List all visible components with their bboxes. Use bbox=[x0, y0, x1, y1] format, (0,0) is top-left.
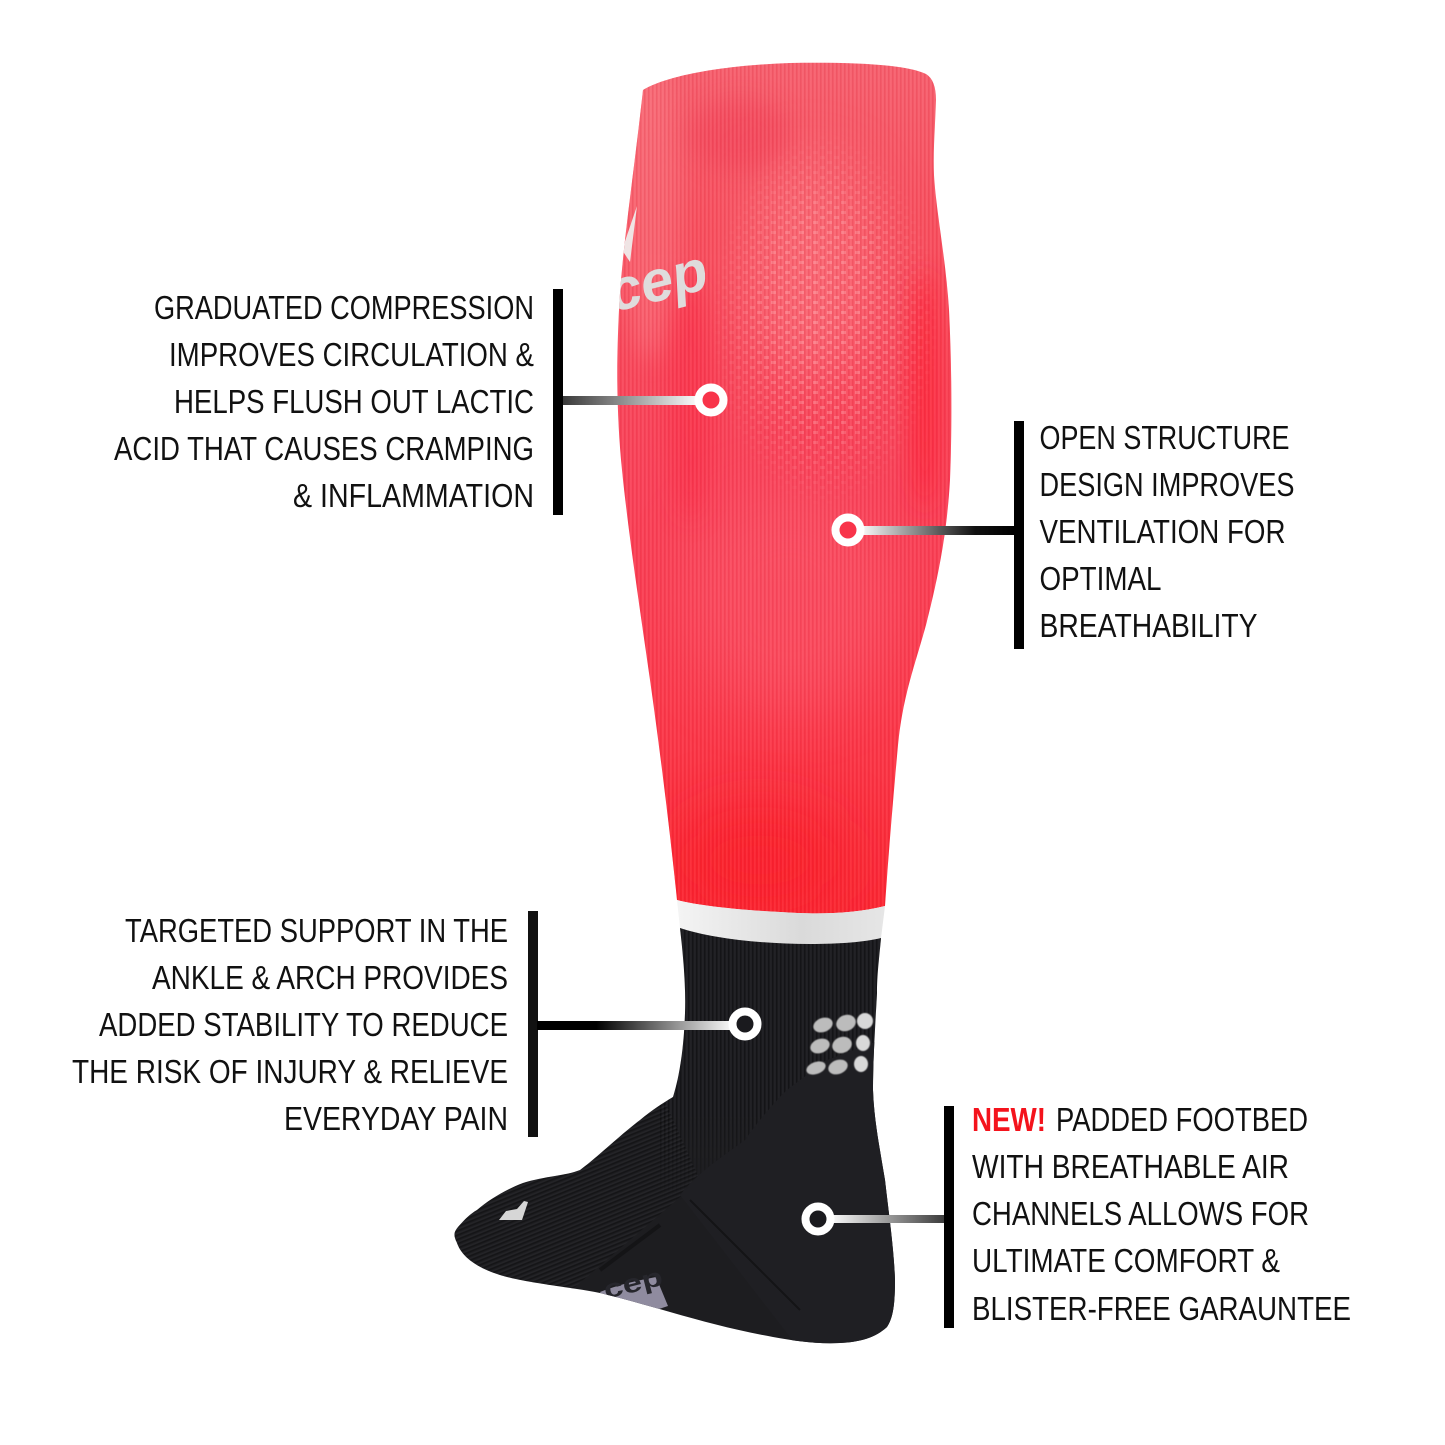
vertical bar bbox=[553, 289, 563, 515]
vertical bar bbox=[1014, 421, 1024, 649]
reflective dots bbox=[805, 1012, 873, 1077]
text: open structure: VENTILATION FOR bbox=[1040, 514, 1286, 551]
marker bbox=[732, 1012, 758, 1036]
infographic canvas bbox=[72, 62, 1350, 1344]
text: open structure: OPEN STRUCTURE bbox=[1040, 420, 1290, 457]
sock calf: pink-red upper bbox=[617, 62, 952, 914]
text: graduated compression bbox=[114, 290, 534, 515]
text: open structure: DESIGN IMPROVES bbox=[1040, 467, 1294, 504]
text: graduated compression: & INFLAMMATION bbox=[293, 478, 534, 515]
connector line bbox=[563, 396, 701, 405]
text: padded footbed: ULTIMATE COMFORT & bbox=[972, 1243, 1280, 1280]
black foot bbox=[440, 920, 910, 1350]
toe mark bbox=[499, 1201, 528, 1220]
marker bbox=[836, 518, 860, 542]
connector line bbox=[537, 1021, 735, 1030]
heel panel bbox=[680, 1040, 900, 1350]
vertical bar bbox=[944, 1106, 954, 1328]
text: targeted support: TARGETED SUPPORT IN THE bbox=[125, 913, 508, 950]
white band bbox=[677, 900, 885, 944]
logo: cep: cep bbox=[601, 237, 714, 325]
text: padded footbed: PADDED FOOTBED bbox=[1056, 1102, 1308, 1139]
text: graduated compression: GRADUATED COMPRESSION bbox=[154, 290, 534, 327]
text: targeted support: ADDED STABILITY TO REDUCE bbox=[99, 1007, 508, 1044]
callout: graduated compression bbox=[114, 289, 724, 515]
callout: padded footbed bbox=[806, 1102, 1351, 1328]
text: padded footbed: CHANNELS ALLOWS FOR bbox=[972, 1196, 1309, 1233]
vertical bar bbox=[528, 911, 538, 1137]
connector line bbox=[858, 526, 1014, 535]
compression sock bbox=[440, 40, 970, 1350]
text: targeted support bbox=[72, 913, 508, 1138]
text: targeted support: EVERYDAY PAIN bbox=[284, 1101, 508, 1138]
marker bbox=[698, 388, 724, 412]
marker bbox=[806, 1206, 830, 1232]
callout: targeted support bbox=[72, 911, 758, 1138]
black foot: cep bbox=[600, 1261, 666, 1305]
text: open structure bbox=[1040, 420, 1294, 645]
text: targeted support: THE RISK OF INJURY & RELIEVE bbox=[72, 1054, 508, 1091]
logo mark on side bbox=[622, 206, 637, 262]
connector line bbox=[828, 1215, 944, 1223]
text: targeted support: ANKLE & ARCH PROVIDES bbox=[152, 960, 508, 997]
text: graduated compression: HELPS FLUSH OUT LACTIC bbox=[174, 384, 534, 421]
callout: open structure bbox=[836, 420, 1294, 649]
new label: NEW! bbox=[972, 1102, 1046, 1139]
sole logo bbox=[600, 1277, 668, 1312]
text: open structure: BREATHABILITY bbox=[1040, 608, 1258, 645]
text: padded footbed bbox=[972, 1102, 1351, 1328]
text: padded footbed: WITH BREATHABLE AIR bbox=[972, 1149, 1289, 1186]
text: padded footbed: BLISTER-FREE GARAUNTEE bbox=[972, 1291, 1351, 1328]
text: graduated compression: IMPROVES CIRCULATION & bbox=[169, 337, 534, 374]
text: open structure: OPTIMAL bbox=[1040, 561, 1162, 598]
text: graduated compression: ACID THAT CAUSES CRAMPING bbox=[114, 431, 534, 468]
